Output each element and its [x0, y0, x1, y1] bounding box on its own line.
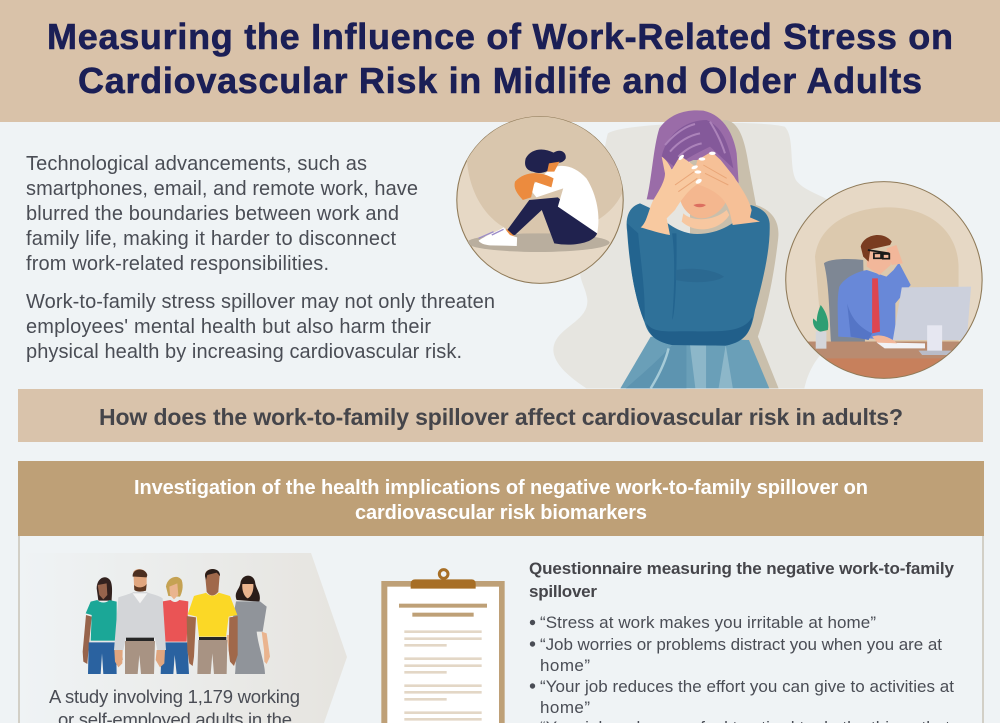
title: Measuring the Influence of Work-Related Stress on	[47, 16, 953, 57]
intro text block: Work-to-family stress spillover may not only threaten	[26, 291, 495, 313]
title	[47, 16, 953, 101]
questionnaire items: “Stress at work makes you irritable at home”	[540, 613, 876, 632]
panel heading	[18, 461, 984, 536]
intro text block: from work-related responsibilities.	[26, 253, 329, 275]
arrow: study to questionnaire	[20, 553, 347, 723]
question banner	[18, 389, 983, 442]
study text: A study involving 1,179 working	[49, 686, 300, 707]
questionnaire heading	[529, 559, 955, 601]
icon: left circle, person hugging knees	[457, 117, 623, 283]
title band	[0, 0, 1000, 122]
questionnaire items: home”	[540, 698, 590, 717]
question banner: How does the work-to-family spillover affect cardiovascular risk in adults?	[99, 404, 903, 430]
questionnaire heading: spillover	[529, 582, 597, 601]
intro text block: employees' mental health but also harm their	[26, 316, 431, 338]
questionnaire items: “Your job reduces the effort you can give to activities at	[540, 677, 954, 696]
intro text block: Technological advancements, such as	[26, 153, 367, 175]
title: Cardiovascular Risk in Midlife and Older Adults	[78, 60, 922, 101]
icon: group of adults	[83, 569, 270, 674]
intro text block: physical health by increasing cardiovascular risk.	[26, 341, 462, 363]
panel: investigation	[18, 461, 984, 723]
questionnaire items: “Job worries or problems distract you when you are at	[540, 635, 942, 654]
panel heading: Investigation of the health implications of negative work-to-family spillover on	[134, 477, 868, 499]
study text	[49, 686, 300, 723]
intro text block: blurred the boundaries between work and	[26, 203, 399, 225]
intro text block: family life, making it harder to disconnect	[26, 228, 396, 250]
intro text block: smartphones, email, and remote work, have	[26, 178, 418, 200]
icon: woman body and backdrop	[553, 120, 840, 388]
intro text block	[26, 153, 495, 363]
questionnaire items	[530, 613, 954, 723]
questionnaire items: home”	[540, 656, 590, 675]
icon: woman head and hands	[641, 110, 760, 235]
questionnaire heading: Questionnaire measuring the negative work-to-family	[529, 559, 955, 578]
hero illustration	[457, 110, 983, 388]
panel heading: cardiovascular risk biomarkers	[355, 502, 647, 524]
icon: right circle, man at desk	[783, 182, 983, 380]
icon: clipboard	[381, 570, 505, 723]
